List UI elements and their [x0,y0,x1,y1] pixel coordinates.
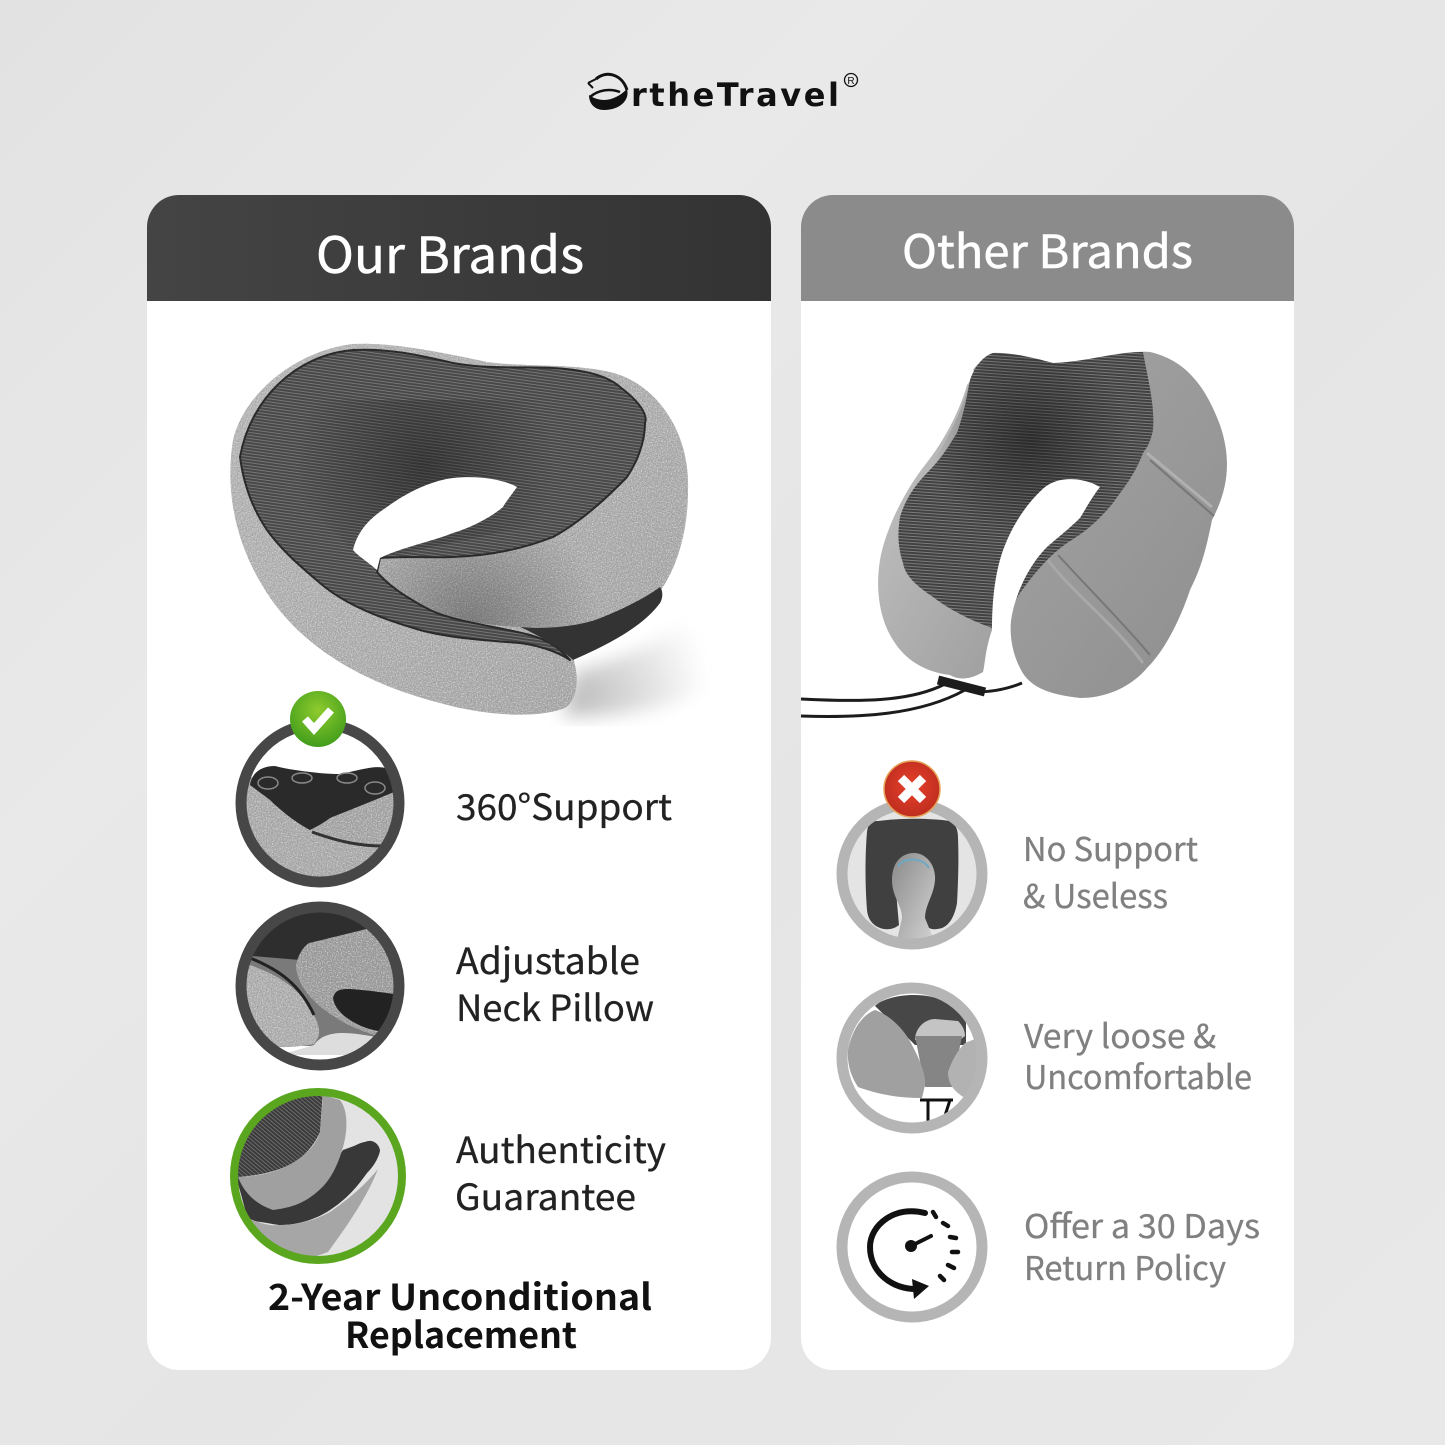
brand logo [588,74,858,114]
icon: loose fit circle [842,988,985,1128]
feature: adjustable [240,905,654,1066]
product: U-shaped pillow [801,352,1227,717]
feature: adjustable: Neck Pillow [456,980,654,1032]
label: Offer a 30 Days [1024,1200,1260,1248]
label: Authenticity [456,1122,666,1174]
heading: Our Brands [316,216,584,288]
panel header [801,195,1294,301]
feature: return policy: Return Policy [1024,1242,1226,1290]
feature: authenticity guarantee: Guarantee [455,1169,636,1221]
panel card [801,195,1294,1370]
replacement callout [268,1269,652,1359]
replacement callout: 2-Year Unconditional [268,1269,652,1321]
feature: very loose [842,988,1252,1128]
icon: authenticity circle [230,1090,402,1262]
label: Very loose & [1024,1010,1216,1058]
icon: globe with plane [588,74,628,110]
registered mark [844,74,858,87]
icon: adjustable circle [240,905,400,1066]
label: Adjustable [456,933,640,985]
label: 360°Support [456,779,672,831]
icon: clock return circle [842,1177,982,1317]
icon: green check badge [290,691,346,747]
icon: red cross badge [884,761,940,817]
replacement callout: Replacement [345,1307,577,1359]
drawstring [801,680,1022,717]
feature: very loose: Uncomfortable [1024,1051,1252,1099]
product: adjustable neck pillow [230,344,700,716]
panel header [147,195,771,301]
panel card [147,195,771,1370]
panel: our brands [147,195,771,1370]
feature: no support: & Useless [1023,870,1168,918]
feature: return policy [842,1177,1260,1317]
heading: Other Brands [902,216,1193,282]
registered mark: R [847,76,855,87]
feature: authenticity guarantee [230,1090,666,1262]
feature: 360 support [240,691,672,890]
label: No Support [1023,823,1198,871]
icon: no support circle [842,804,982,945]
logo wordmark: rtheTravel [631,76,839,114]
icon: 360 support circle [240,723,400,890]
feature: no support [842,761,1198,945]
panel: other brands [801,195,1294,1370]
